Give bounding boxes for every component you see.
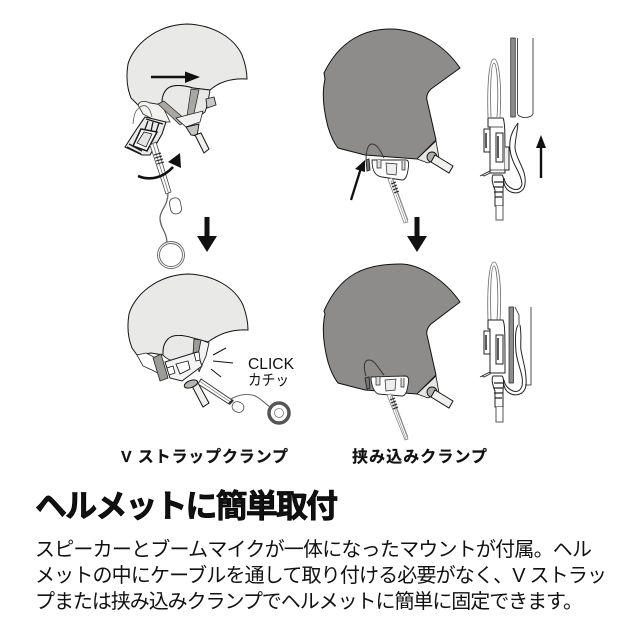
wire loop — [364, 360, 384, 376]
arrow: push up into helmet — [351, 160, 365, 200]
wire loop — [366, 144, 384, 162]
microphone cable — [388, 178, 408, 223]
microphone cable — [387, 394, 408, 440]
speaker ring — [158, 242, 184, 268]
helmet: dark grey shell — [323, 264, 460, 394]
helmet inner liner and straps — [137, 336, 209, 381]
helmet shell edge and liner — [509, 307, 531, 385]
arrow: curved rotate — [138, 153, 181, 178]
panel: V strap clamp, before attaching — [125, 24, 247, 268]
buckle and chin strap — [417, 141, 453, 173]
description text: プまたは挟み込みクランプでヘルメットに簡単に固定できます。 — [35, 590, 583, 613]
boom microphone cable — [150, 142, 183, 243]
helmet inner liner and straps — [138, 86, 216, 153]
speaker disc — [269, 403, 289, 423]
caption: V strap clamp: V ストラップクランプ — [121, 448, 288, 466]
caption: pinch clamp: 挟み込みクランプ — [352, 448, 487, 466]
panel: pinch clamp, before attaching — [323, 29, 460, 223]
helmet: light grey shell — [127, 24, 247, 105]
side device with clip — [480, 59, 525, 220]
panel: V strap clamp, attached — [128, 274, 294, 423]
title: ヘルメットに簡単取付 — [35, 488, 338, 524]
arrow: down, pinch clamp — [407, 217, 427, 252]
description text: メットの中にケーブルを通して取り付ける必要がなく、V ストラッ — [35, 563, 607, 587]
description text — [35, 537, 607, 613]
boom microphone cable — [198, 379, 270, 414]
helmet shell edge and liner — [511, 38, 533, 118]
label: click — [248, 356, 294, 389]
buckle and chin strap — [183, 378, 209, 407]
clamp plate — [366, 159, 409, 180]
buckle and chin strap — [417, 376, 453, 408]
click marks — [211, 348, 233, 377]
arrow: down, V strap — [197, 217, 217, 252]
clamp plate — [365, 376, 409, 396]
panel: side view, inserted — [480, 262, 531, 422]
side device with clip — [480, 262, 526, 422]
arrow: slide right — [151, 72, 200, 83]
label: click: カチッ — [248, 372, 289, 389]
description text: スピーカーとブームマイクが一体になったマウントが付属。ヘル — [35, 537, 592, 561]
panel: pinch clamp, attached — [323, 264, 460, 440]
speaker mount plate — [125, 106, 166, 155]
label: click: CLICK — [248, 356, 294, 373]
helmet: dark grey shell — [323, 29, 460, 159]
helmet: light grey shell — [128, 274, 248, 355]
speaker mount plate — [165, 352, 202, 381]
panel: side view, before insertion — [480, 38, 546, 220]
arrow: up — [536, 135, 546, 178]
